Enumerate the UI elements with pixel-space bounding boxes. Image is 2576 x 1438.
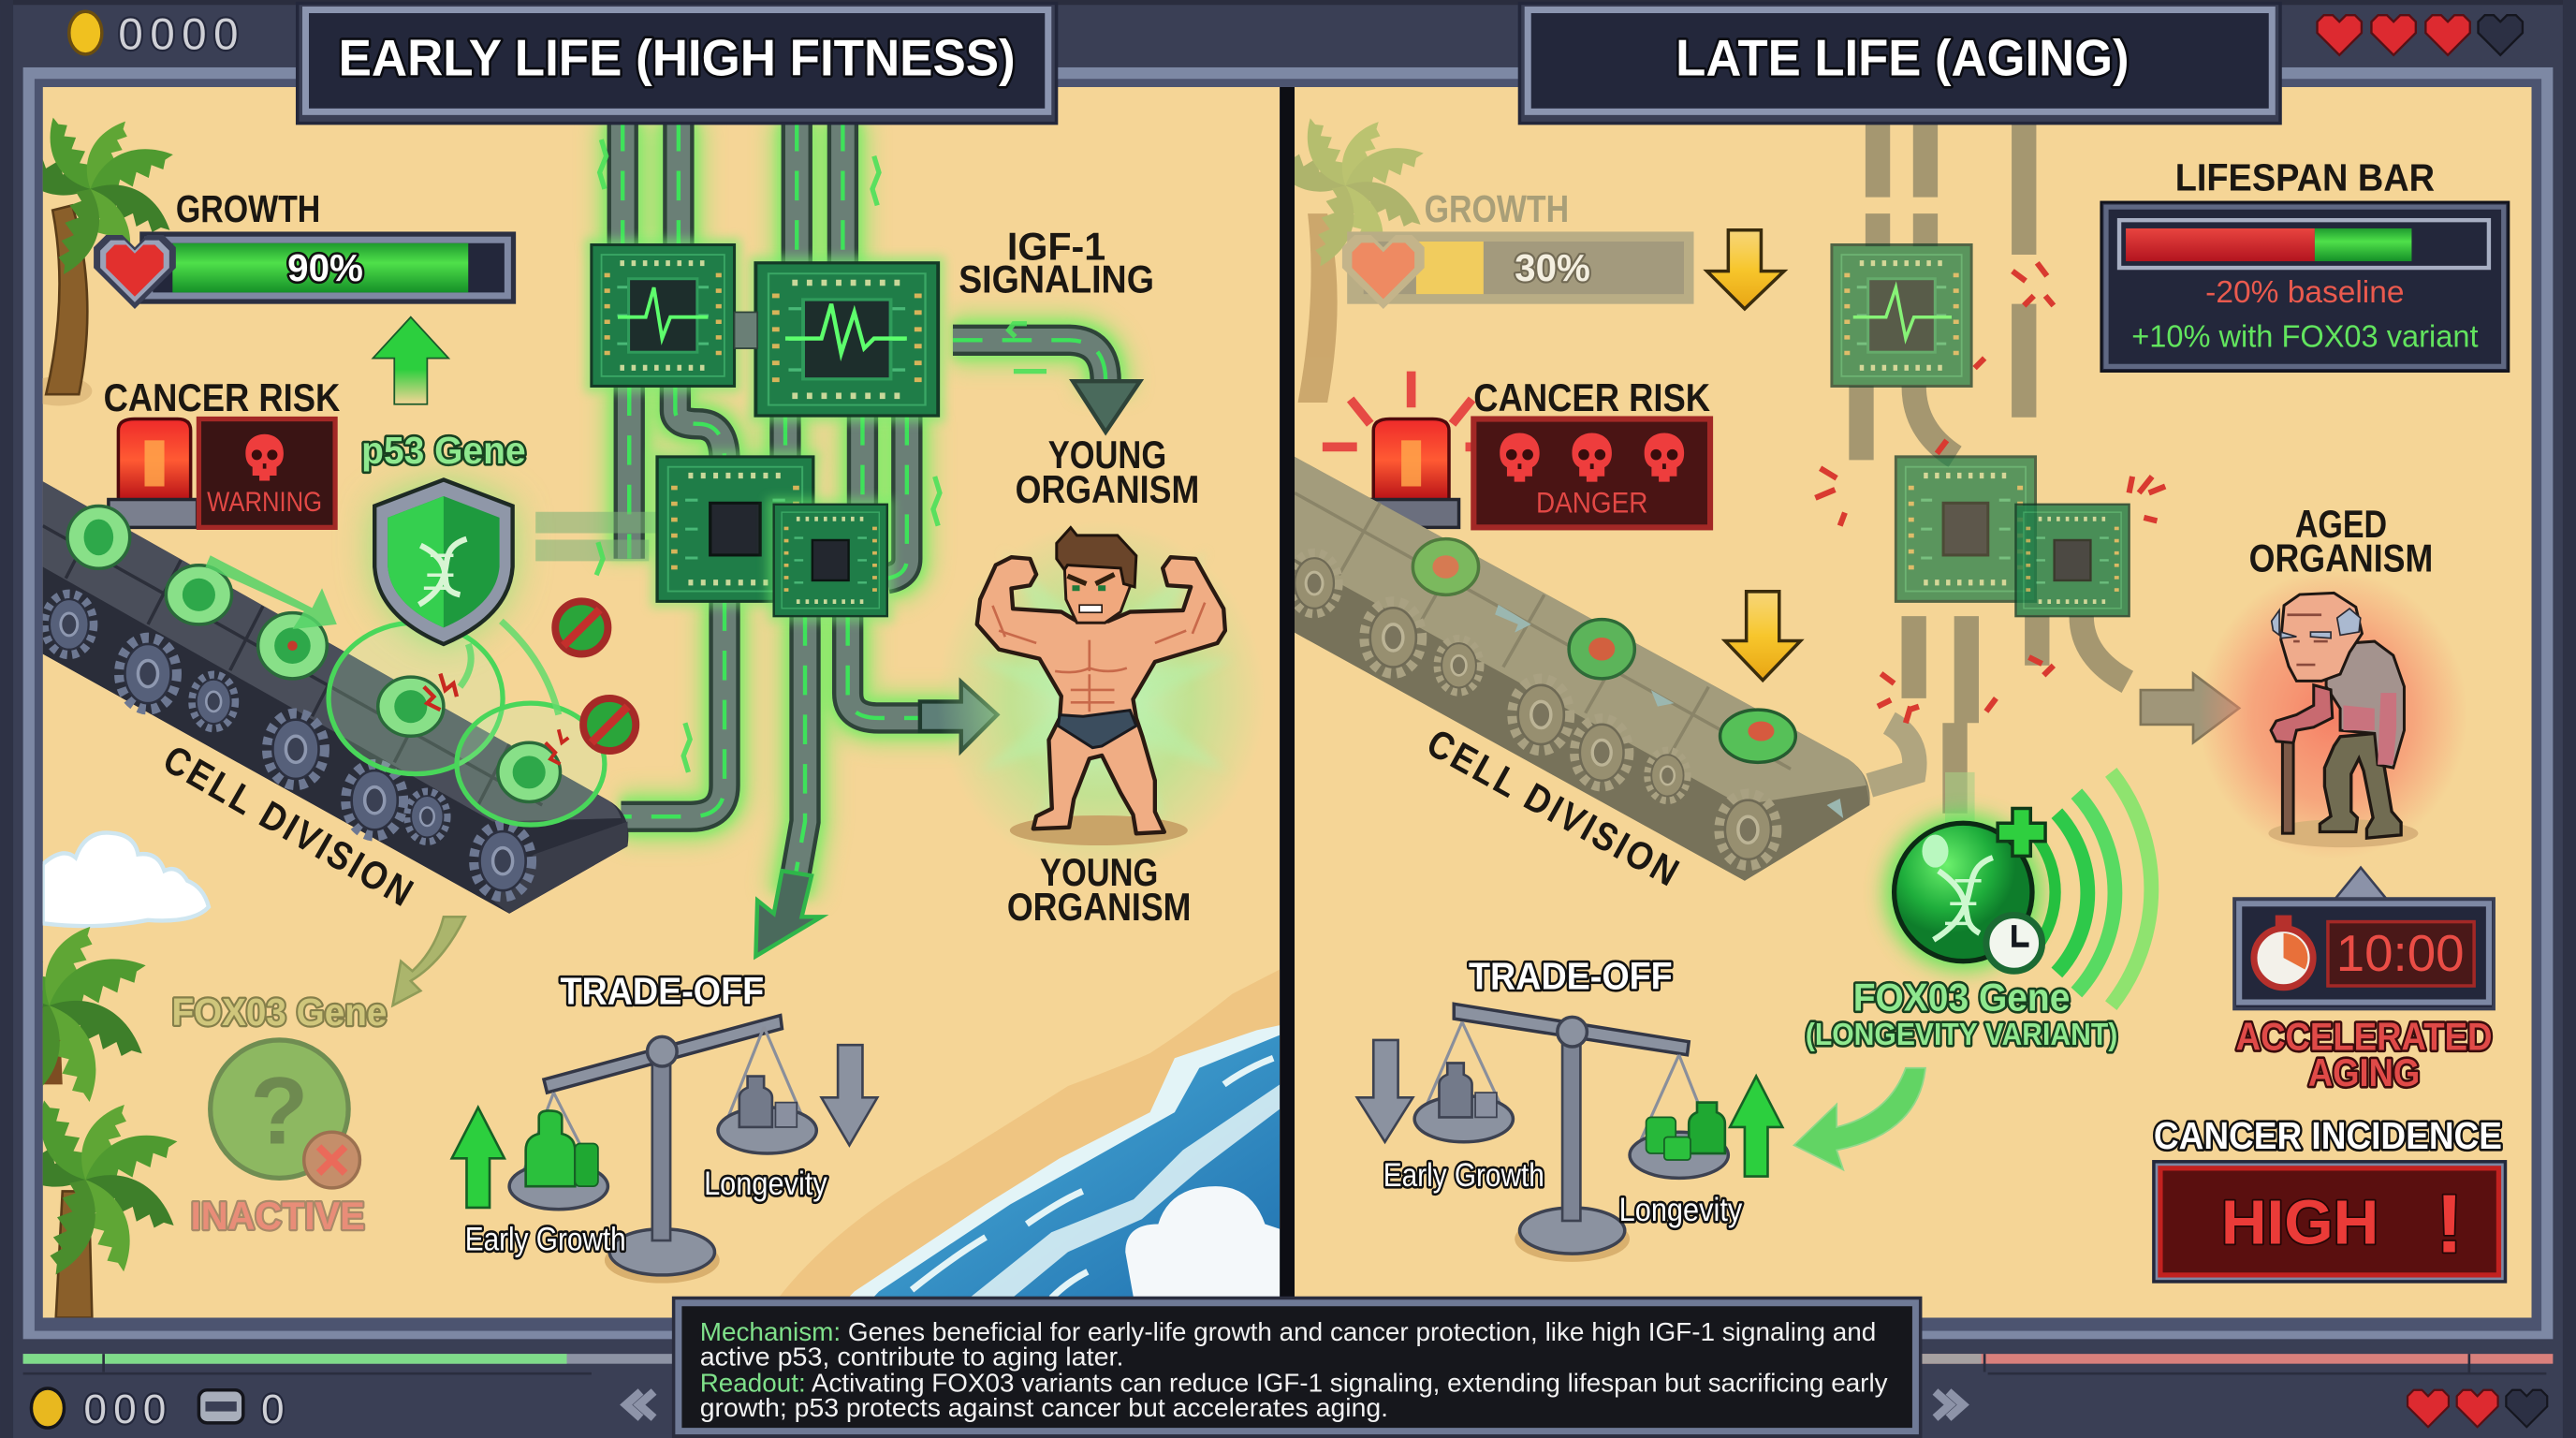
block icons — [555, 601, 636, 751]
chip connector — [735, 312, 757, 348]
cancer incidence label: CANCER INCIDENCE — [2154, 1114, 2502, 1157]
cell division label: CELL DIVISION — [156, 737, 423, 916]
accelerated aging label: AGING — [2308, 1050, 2420, 1094]
timer — [2234, 868, 2494, 1009]
protective domes with cells — [329, 623, 605, 825]
faded pipes — [1862, 122, 2128, 814]
IGF-1 signaling label: IGF-1 — [1007, 224, 1105, 268]
trade-off label: TRADE-OFF — [1469, 955, 1673, 998]
danger box: DANGER — [1536, 486, 1647, 520]
fox03 gene label — [1806, 975, 2117, 1052]
gray arrow down — [1357, 1040, 1412, 1142]
faded palm tree — [1261, 111, 1429, 403]
fox03 longevity orb — [1884, 772, 2151, 1005]
title: early life — [298, 4, 1057, 124]
balance — [1414, 1004, 1728, 1262]
faded chips — [1832, 244, 2130, 616]
glow — [936, 521, 1265, 875]
HUD: rewind arrows — [626, 1392, 654, 1418]
faded arrow to FOX03 — [393, 917, 465, 1005]
green arrow up — [1730, 1077, 1782, 1177]
small conveyor direction arrows — [1495, 605, 1843, 818]
aged organism — [2198, 570, 2467, 859]
growth label: GROWTH — [176, 187, 320, 230]
inactive label: INACTIVE — [191, 1194, 365, 1238]
HUD: coin counter: 0000 — [118, 10, 243, 60]
young organism label bottom: ORGANISM — [1007, 885, 1191, 929]
title: late life — [1519, 4, 2280, 124]
inactive FOX03 orb: ? — [250, 1057, 309, 1164]
faded conveyor — [1291, 457, 1870, 881]
IGF-1 pipes glow — [535, 122, 1140, 956]
clock icon — [1986, 916, 2042, 971]
label: longevity: Longevity — [1619, 1192, 1743, 1228]
cancer risk label: CANCER RISK — [104, 375, 341, 419]
young organism label top — [1016, 433, 1199, 511]
bottom progress: left — [23, 1354, 674, 1373]
palm tree top-left — [43, 118, 173, 406]
arrow: p53 scanning cells — [205, 555, 337, 629]
growth bar 90%: 90% — [287, 246, 363, 289]
lifespan bar panel — [2101, 202, 2509, 372]
mechanism and readout caption: active p53, contribute to aging later. — [700, 1342, 1123, 1371]
HUD: coins bottom left — [31, 1387, 169, 1432]
growth label faded: GROWTH — [1425, 187, 1569, 230]
danger box — [1473, 419, 1710, 527]
panel: late life — [1261, 87, 2532, 1318]
HUD: item counter: 0 — [261, 1387, 285, 1432]
stopwatch icon — [2254, 916, 2313, 988]
growth bar 90% — [94, 231, 516, 309]
chip 4 late — [2015, 505, 2130, 616]
sand background — [43, 87, 1280, 1318]
mechanism and readout caption: Mechanism: Genes beneficial for early-life growth and cancer protection, like high IGF-1 signaling and — [700, 1317, 1876, 1346]
sand background — [1295, 87, 2532, 1318]
title: early life: EARLY LIFE (HIGH FITNESS) — [339, 30, 1016, 87]
conveyor belt — [43, 481, 628, 914]
mechanism and readout caption: growth; p53 protects against cancer but accelerates aging. — [700, 1393, 1388, 1422]
cloud — [43, 832, 209, 926]
HUD: forward arrows — [1935, 1392, 1963, 1418]
longevity waves — [2037, 772, 2151, 1005]
HUD: item counter — [198, 1387, 285, 1432]
curved green arrow — [1794, 1068, 1925, 1170]
arrow to aged organism — [2141, 674, 2239, 742]
bottom progress: right — [1919, 1354, 2553, 1373]
p53 gene label: p53 Gene — [361, 429, 526, 472]
young organism label top: ORGANISM — [1016, 467, 1199, 511]
mechanism and readout caption — [672, 1297, 1922, 1438]
fox03 gene label: FOX03 Gene — [1853, 975, 2070, 1019]
fox03 gene label: (LONGEVITY VARIANT) — [1806, 1018, 2117, 1052]
yellow arrow down: conveyor — [1725, 592, 1801, 681]
red sparks — [1815, 263, 2165, 723]
young organism label bottom — [1007, 850, 1191, 929]
plus icon — [1998, 808, 2045, 856]
gray arrow down — [822, 1045, 877, 1145]
FOX03 gene label inactive: FOX03 Gene — [171, 990, 387, 1034]
growth bar 30%: 30% — [1515, 246, 1590, 289]
curved arrows from shield to domes — [460, 621, 559, 714]
young organism label bottom: YOUNG — [1040, 850, 1158, 894]
chip 4 — [768, 498, 894, 623]
title: late life: LATE LIFE (AGING) — [1676, 30, 2130, 87]
green arrow up — [452, 1108, 505, 1208]
young organism label top: YOUNG — [1048, 433, 1166, 477]
warning box: WARNING — [207, 487, 322, 518]
label: early growth: Early Growth — [465, 1222, 626, 1258]
diseased cells — [1412, 539, 1795, 762]
siren light — [109, 419, 198, 527]
aged organism label: ORGANISM — [2249, 536, 2433, 580]
chips: IGF-1 signaling — [585, 238, 944, 623]
red glow — [2198, 570, 2467, 859]
high indicator: ! — [2436, 1178, 2463, 1269]
cells on conveyor — [67, 506, 327, 679]
muscular young organism — [936, 521, 1265, 875]
lifespan bar label: LIFESPAN BAR — [2175, 156, 2435, 199]
label: early growth: Early Growth — [1383, 1157, 1544, 1194]
chip 1 — [585, 238, 741, 392]
cancer risk label: CANCER RISK — [1473, 375, 1711, 419]
center divider — [1280, 87, 1295, 1303]
yellow arrow down: growth — [1707, 230, 1784, 309]
HUD: hearts bottom right — [2408, 1390, 2547, 1427]
aged organism label — [2249, 502, 2433, 580]
IGF-1 signaling label — [959, 232, 1152, 293]
inactive FOX03 orb — [211, 1040, 359, 1188]
trade-off scale early — [452, 969, 877, 1284]
beach shoreline — [764, 969, 1280, 1318]
panel: early life — [0, 87, 1280, 1318]
timer: 10:00 — [2336, 925, 2465, 982]
chip 2 — [749, 257, 944, 422]
HUD: coins bottom left: 000 — [84, 1387, 169, 1432]
palm tree bottom-left — [0, 1093, 184, 1318]
trade-off scale late — [1357, 955, 1782, 1262]
high indicator: HIGH — [2221, 1189, 2378, 1258]
p53 shield — [374, 479, 513, 644]
high indicator — [2154, 1162, 2505, 1282]
chip 3 — [651, 450, 820, 608]
label: longevity: Longevity — [704, 1166, 827, 1202]
mechanism and readout caption: Readout: Activating FOX03 variants can reduce IGF-1 signaling, extending lifespan but sacrificing early — [700, 1369, 1888, 1398]
lifespan bar panel: -20% baseline — [2205, 275, 2405, 310]
chip 1 late — [1832, 244, 1971, 386]
arrow up: growth increase — [373, 317, 448, 404]
siren with rays — [1323, 372, 1499, 527]
balance — [509, 1016, 816, 1284]
warning box — [198, 419, 335, 527]
trade-off label: TRADE-OFF — [561, 969, 764, 1012]
chip 3 late — [1895, 457, 2036, 601]
cell division label: CELL DIVISION — [1420, 720, 1689, 896]
accelerated aging label — [2236, 1014, 2492, 1094]
accelerated aging label: ACCELERATED — [2236, 1014, 2492, 1058]
growth bar 30% — [1342, 231, 1693, 309]
aged organism label: AGED — [2295, 502, 2387, 546]
IGF-1 signaling label: SIGNALING — [959, 257, 1154, 301]
HUD: hearts top right — [2318, 15, 2523, 55]
palm tree middle-left — [0, 914, 153, 1112]
lifespan bar panel: +10% with FOX03 variant — [2131, 319, 2479, 354]
